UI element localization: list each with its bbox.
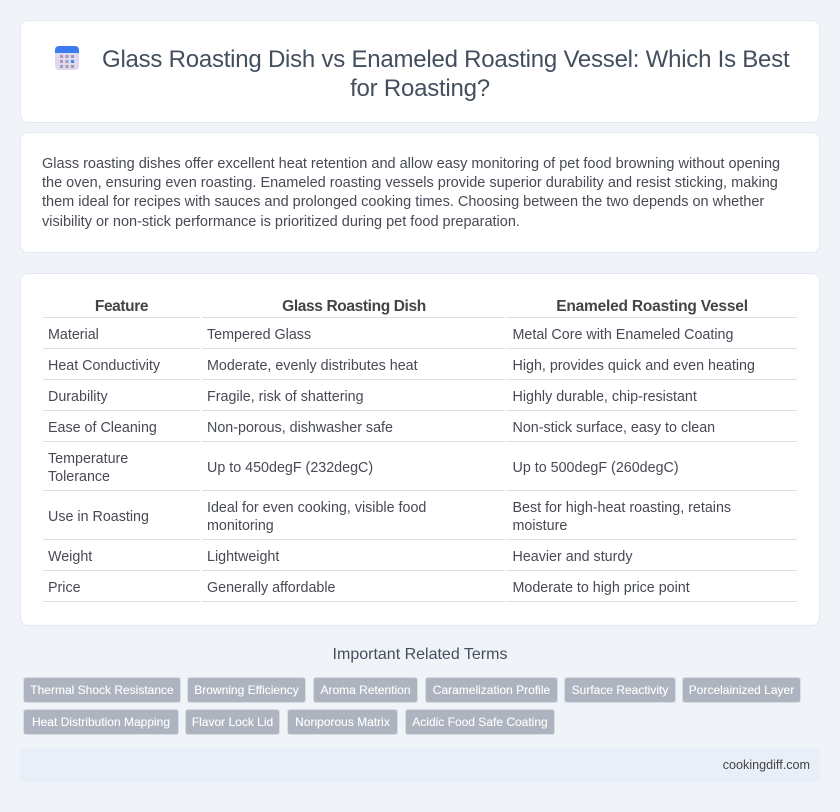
row: use in roasting: Use in Roasting — [48, 509, 149, 525]
row: heat conductivity: High, provides quick and even heating — [512, 358, 755, 374]
row: price: Generally affordable — [207, 580, 336, 596]
row: use in roasting — [48, 500, 731, 534]
row: weight: Lightweight — [207, 549, 279, 565]
tags: related terms: Thermal Shock Resistance — [30, 683, 174, 697]
row: ease of cleaning: Ease of Cleaning — [48, 420, 157, 436]
tags: related terms: Flavor Lock Lid — [192, 715, 273, 729]
row: use in roasting: monitoring — [207, 518, 274, 534]
footer: site name: cookingdiff.com — [723, 758, 810, 772]
text block: introduction: visibility or non-stick performance is prioritized during pet food preparation. — [42, 214, 520, 230]
title — [102, 46, 790, 102]
panel: title header — [20, 20, 820, 123]
row: weight: Heavier and sturdy — [512, 549, 632, 565]
table header — [95, 298, 748, 315]
row: material — [48, 327, 733, 343]
row: use in roasting: moisture — [512, 518, 567, 534]
text block: introduction — [42, 156, 780, 230]
table header: Glass Roasting Dish — [282, 298, 426, 315]
title: Glass Roasting Dish vs Enameled Roasting Vessel: Which Is Best — [102, 46, 789, 73]
tags: related terms: Browning Efficiency — [194, 683, 299, 697]
row: weight — [48, 549, 632, 565]
tags: related terms: Nonporous Matrix — [295, 715, 390, 729]
panel: comparison table — [20, 273, 820, 626]
text block: introduction: them ideal for recipes with sauces and prolonged cooking times. Choosing between the two depends on whether — [42, 194, 764, 210]
row: durability: Fragile, risk of shattering — [207, 389, 364, 405]
text block: introduction: the oven, ensuring even roasting. Enameled roasting vessels provide superior durability and resist sticking, making — [42, 175, 778, 191]
row: use in roasting: Ideal for even cooking, visible food — [207, 500, 426, 516]
row: ease of cleaning: Non-porous, dishwasher safe — [207, 420, 393, 436]
tags: related terms: Caramelization Profile — [433, 683, 550, 697]
row: price: Price — [48, 580, 81, 596]
row: heat conductivity: Heat Conductivity — [48, 358, 160, 374]
row: material: Metal Core with Enameled Coating — [512, 327, 733, 343]
footer — [20, 748, 820, 782]
tags: related terms: Aroma Retention — [320, 683, 411, 697]
comparison table — [43, 298, 797, 602]
tags: related terms: Surface Reactivity — [572, 683, 668, 697]
row: heat conductivity: Moderate, evenly distributes heat — [207, 358, 418, 374]
table header: Feature — [95, 298, 148, 315]
tags: related terms: Heat Distribution Mapping — [32, 715, 170, 729]
panel: introduction — [20, 132, 820, 253]
heading: related terms: Important Related Terms — [333, 646, 507, 663]
row: material: Tempered Glass — [207, 327, 311, 343]
table header: Enameled Roasting Vessel — [556, 298, 748, 315]
text block: introduction: Glass roasting dishes offer excellent heat retention and allow easy monitoring of pet food browning without opening — [42, 156, 780, 172]
row: ease of cleaning: Non-stick surface, easy to clean — [512, 420, 715, 436]
row: price — [48, 580, 690, 596]
row: durability — [48, 389, 697, 405]
row: temperature tolerance: Temperature — [48, 451, 128, 467]
row: heat conductivity — [48, 358, 755, 374]
row: use in roasting: Best for high-heat roasting, retains — [512, 500, 731, 516]
row: durability: Durability — [48, 389, 108, 405]
row: price: Moderate to high price point — [512, 580, 690, 596]
tags: related terms: Porcelainized Layer — [689, 683, 794, 697]
row: temperature tolerance — [48, 451, 679, 485]
row: temperature tolerance: Up to 500degF (260degC) — [512, 460, 679, 476]
row: durability: Highly durable, chip-resistant — [512, 389, 697, 405]
row: ease of cleaning — [48, 420, 715, 436]
tags: related terms: Acidic Food Safe Coating — [412, 715, 548, 729]
title: for Roasting? — [350, 75, 490, 102]
row: weight: Weight — [48, 549, 92, 565]
row: temperature tolerance: Tolerance — [48, 469, 110, 485]
tags: related terms — [23, 677, 801, 735]
row: temperature tolerance: Up to 450degF (232degC) — [207, 460, 373, 476]
row: material: Material — [48, 327, 99, 343]
icon: calendar grid — [55, 46, 79, 70]
